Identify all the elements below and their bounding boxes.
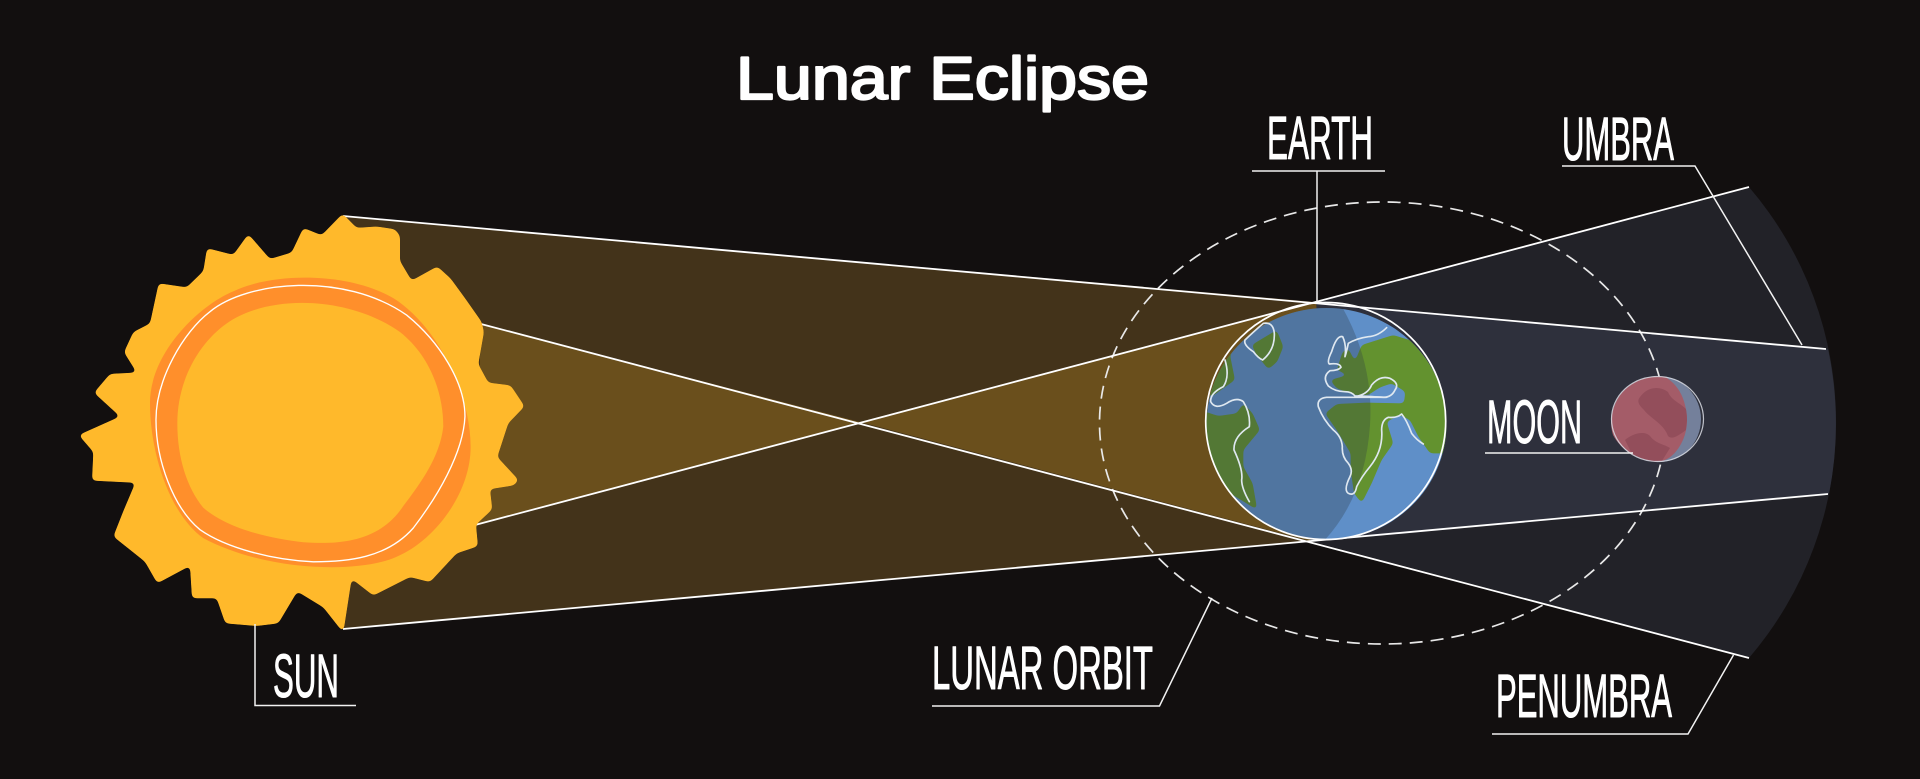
sun white outline bbox=[156, 285, 465, 562]
label: sun bbox=[255, 624, 356, 710]
label: earth bbox=[1252, 104, 1385, 302]
label: earth: EARTH bbox=[1267, 104, 1373, 172]
earth ocean bbox=[1206, 308, 1446, 540]
sun orange ring bbox=[150, 278, 471, 567]
label: penumbra: PENUMBRA bbox=[1496, 662, 1672, 730]
earth bbox=[1204, 302, 1447, 540]
earth land masses bbox=[1200, 330, 1457, 510]
earth night-side shadow bbox=[1206, 308, 1370, 539]
earth coastlines bbox=[1211, 323, 1423, 502]
earth outline bbox=[1206, 302, 1446, 540]
sun core bbox=[177, 303, 443, 543]
label: umbra bbox=[1562, 105, 1802, 345]
label: sun: SUN bbox=[273, 642, 339, 710]
label: penumbra bbox=[1492, 655, 1734, 734]
moon bbox=[1611, 376, 1704, 464]
moon red eclipsed part bbox=[1611, 376, 1687, 462]
sunlight beam: central bow-tie bbox=[475, 302, 1326, 541]
label: umbra: UMBRA bbox=[1562, 105, 1674, 173]
sunlight beam: outer bbox=[343, 216, 1326, 629]
sun bbox=[79, 214, 525, 633]
penumbra shadow fan bbox=[1310, 187, 1836, 658]
moon outline bbox=[1612, 376, 1704, 462]
lunar orbit dashed ellipse bbox=[1100, 202, 1666, 644]
title: Lunar Eclipse bbox=[736, 45, 1149, 112]
moon shaded disc bbox=[1619, 377, 1701, 462]
moon dark patches bbox=[1625, 388, 1688, 464]
label: lunar orbit: LUNAR ORBIT bbox=[932, 634, 1153, 702]
label: moon: MOON bbox=[1487, 388, 1582, 456]
label: lunar orbit bbox=[932, 598, 1212, 706]
ray lines bbox=[343, 187, 1828, 658]
umbra shadow bbox=[1310, 302, 1836, 541]
sun corona bbox=[79, 214, 525, 633]
